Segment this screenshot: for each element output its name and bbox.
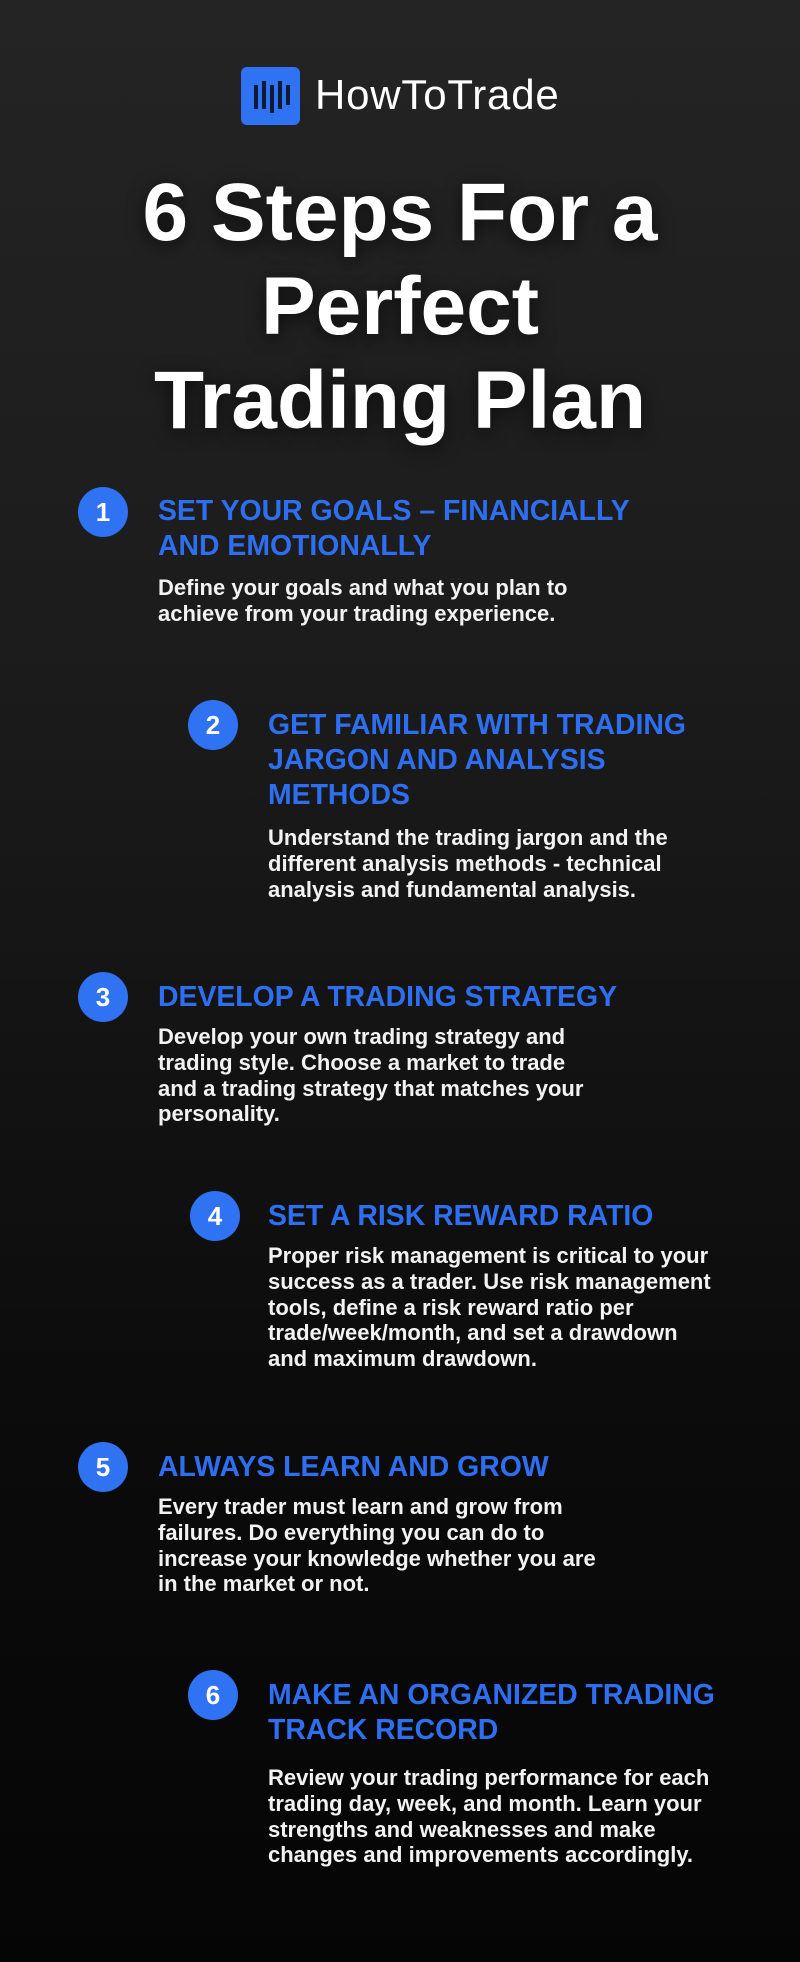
heading 1: SET YOUR GOALS – FINANCIALLY	[158, 495, 630, 527]
number badge 1: 1	[96, 497, 110, 527]
body 1: Define your goals and what you plan to	[158, 575, 567, 600]
number badge 1	[78, 487, 128, 537]
heading 6	[268, 1679, 715, 1746]
number badge 6	[188, 1670, 238, 1720]
step 2	[188, 700, 686, 902]
icon: logo mark	[241, 67, 300, 125]
heading 1	[158, 495, 630, 562]
body 3: personality.	[158, 1101, 280, 1126]
body 1	[158, 575, 567, 626]
body 2: Understand the trading jargon and the	[268, 825, 668, 850]
heading 2: JARGON AND ANALYSIS	[268, 744, 606, 776]
number badge 3	[78, 972, 128, 1022]
number badge 2	[188, 700, 238, 750]
body 4: and maximum drawdown.	[268, 1346, 537, 1371]
heading 4: SET A RISK REWARD RATIO	[268, 1200, 653, 1232]
body 5	[158, 1494, 596, 1596]
logo	[241, 67, 560, 125]
body 6	[268, 1765, 709, 1867]
body 3: trading style. Choose a market to trade	[158, 1050, 565, 1075]
number badge 5	[78, 1442, 128, 1492]
body 6: trading day, week, and month. Learn your	[268, 1791, 702, 1816]
title: Perfect	[261, 261, 539, 352]
heading 2: GET FAMILIAR WITH TRADING	[268, 709, 686, 741]
heading 1: AND EMOTIONALLY	[158, 530, 431, 562]
heading 5: ALWAYS LEARN AND GROW	[158, 1451, 549, 1483]
heading 2: METHODS	[268, 779, 410, 811]
body 6: strengths and weaknesses and make	[268, 1817, 656, 1842]
step 4	[190, 1191, 711, 1371]
body 2: different analysis methods - technical	[268, 851, 662, 876]
heading 6: MAKE AN ORGANIZED TRADING	[268, 1679, 715, 1711]
step 3	[78, 972, 617, 1126]
step 1	[78, 487, 630, 626]
number badge 3: 3	[96, 982, 110, 1012]
body 5: Every trader must learn and grow from	[158, 1494, 563, 1519]
body 3: Develop your own trading strategy and	[158, 1024, 565, 1049]
step 5	[78, 1442, 596, 1596]
body 4: Proper risk management is critical to your	[268, 1243, 708, 1268]
number badge 6: 6	[206, 1680, 220, 1710]
number badge 5: 5	[96, 1452, 110, 1482]
body 6: Review your trading performance for each	[268, 1765, 709, 1790]
body 4: tools, define a risk reward ratio per	[268, 1295, 634, 1320]
body 1: achieve from your trading experience.	[158, 601, 555, 626]
step 6	[188, 1670, 715, 1867]
heading 2	[268, 709, 686, 811]
number badge 4: 4	[208, 1201, 222, 1231]
title: 6 Steps For a	[143, 167, 657, 258]
body 3: and a trading strategy that matches your	[158, 1076, 583, 1101]
body 5: in the market or not.	[158, 1571, 369, 1596]
title	[143, 167, 658, 446]
number badge 4	[190, 1191, 240, 1241]
body 5: increase your knowledge whether you are	[158, 1546, 596, 1571]
heading 6: TRACK RECORD	[268, 1714, 498, 1746]
body 2	[268, 825, 668, 902]
number badge 2: 2	[206, 710, 220, 740]
body 3	[158, 1024, 584, 1126]
body 4: trade/week/month, and set a drawdown	[268, 1320, 678, 1345]
heading 3: DEVELOP A TRADING STRATEGY	[158, 981, 617, 1013]
body 6: changes and improvements accordingly.	[268, 1842, 693, 1867]
body 5: failures. Do everything you can do to	[158, 1520, 544, 1545]
body 2: analysis and fundamental analysis.	[268, 877, 636, 902]
logo text: HowToTrade	[315, 71, 560, 118]
body 4: success as a trader. Use risk management	[268, 1269, 711, 1294]
title: Trading Plan	[154, 355, 646, 446]
body 4	[268, 1243, 711, 1371]
